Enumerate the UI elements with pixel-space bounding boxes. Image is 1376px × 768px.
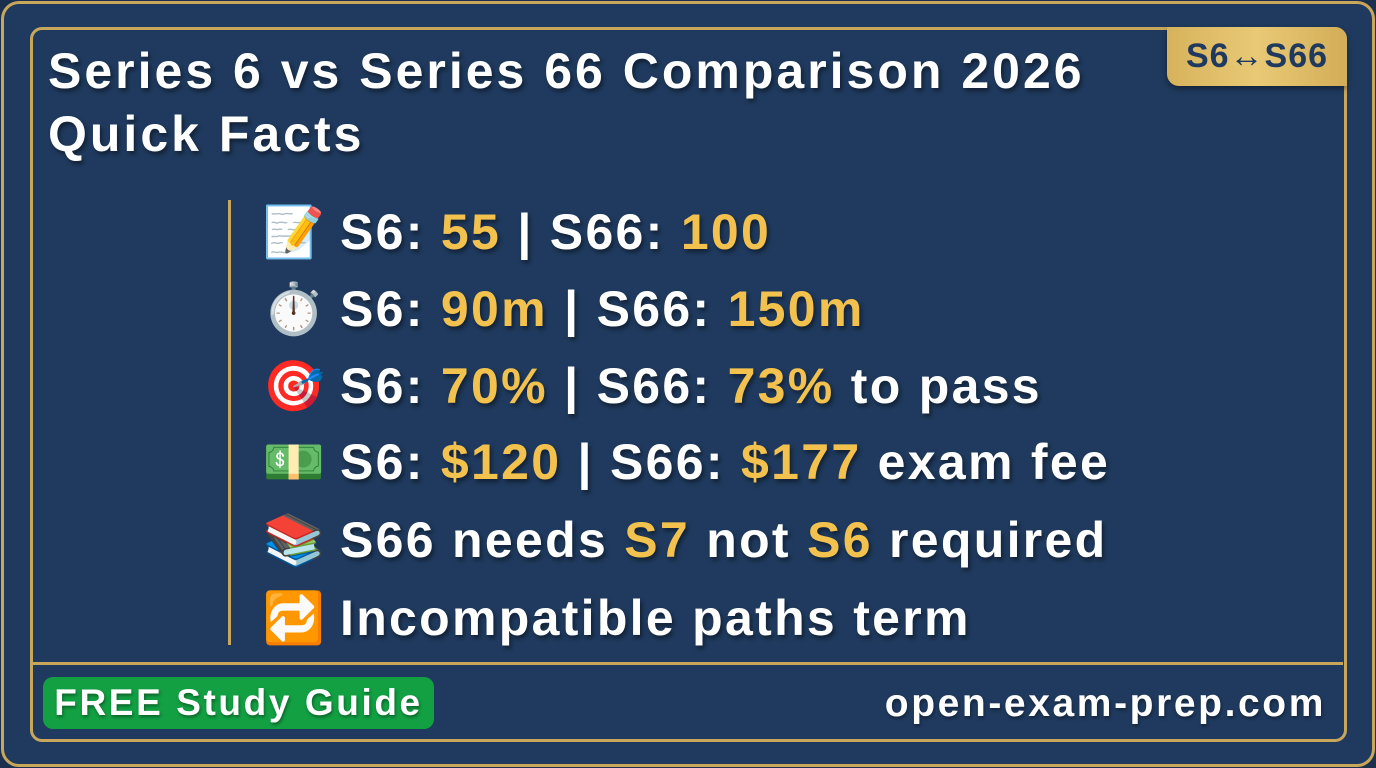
fact: questions: S6: 55 | S66: 100 [340, 204, 771, 260]
fact: paths: 🔁 [263, 590, 325, 646]
fact: exam fee: S6: $120 | S66: $177 exam fee [340, 434, 1110, 490]
title: Quick Facts [48, 106, 364, 162]
badge: S6↔S66 [1186, 37, 1328, 75]
fact: time: S6: 90m | S66: 150m [340, 281, 865, 337]
fact: time: ⏱️ [263, 281, 325, 337]
fact: passing score: S6: 70% | S66: 73% to pass [340, 358, 1042, 414]
website url: open-exam-prep.com [885, 682, 1326, 725]
fact: passing score: 🎯 [263, 358, 325, 414]
fact: exam fee: 💵 [263, 434, 325, 490]
fact: paths: Incompatible paths term [340, 590, 971, 646]
fact: prerequisite: 📚 [263, 512, 325, 568]
title: Series 6 vs Series 66 Comparison 2026 [48, 43, 1085, 99]
title [48, 43, 1085, 166]
free study guide button: FREE Study Guide [54, 682, 423, 723]
fact: prerequisite: S66 needs S7 not S6 required [340, 512, 1107, 568]
vertical accent line [228, 200, 231, 645]
badge [1167, 27, 1347, 86]
fact: questions: 📝 [263, 204, 325, 260]
